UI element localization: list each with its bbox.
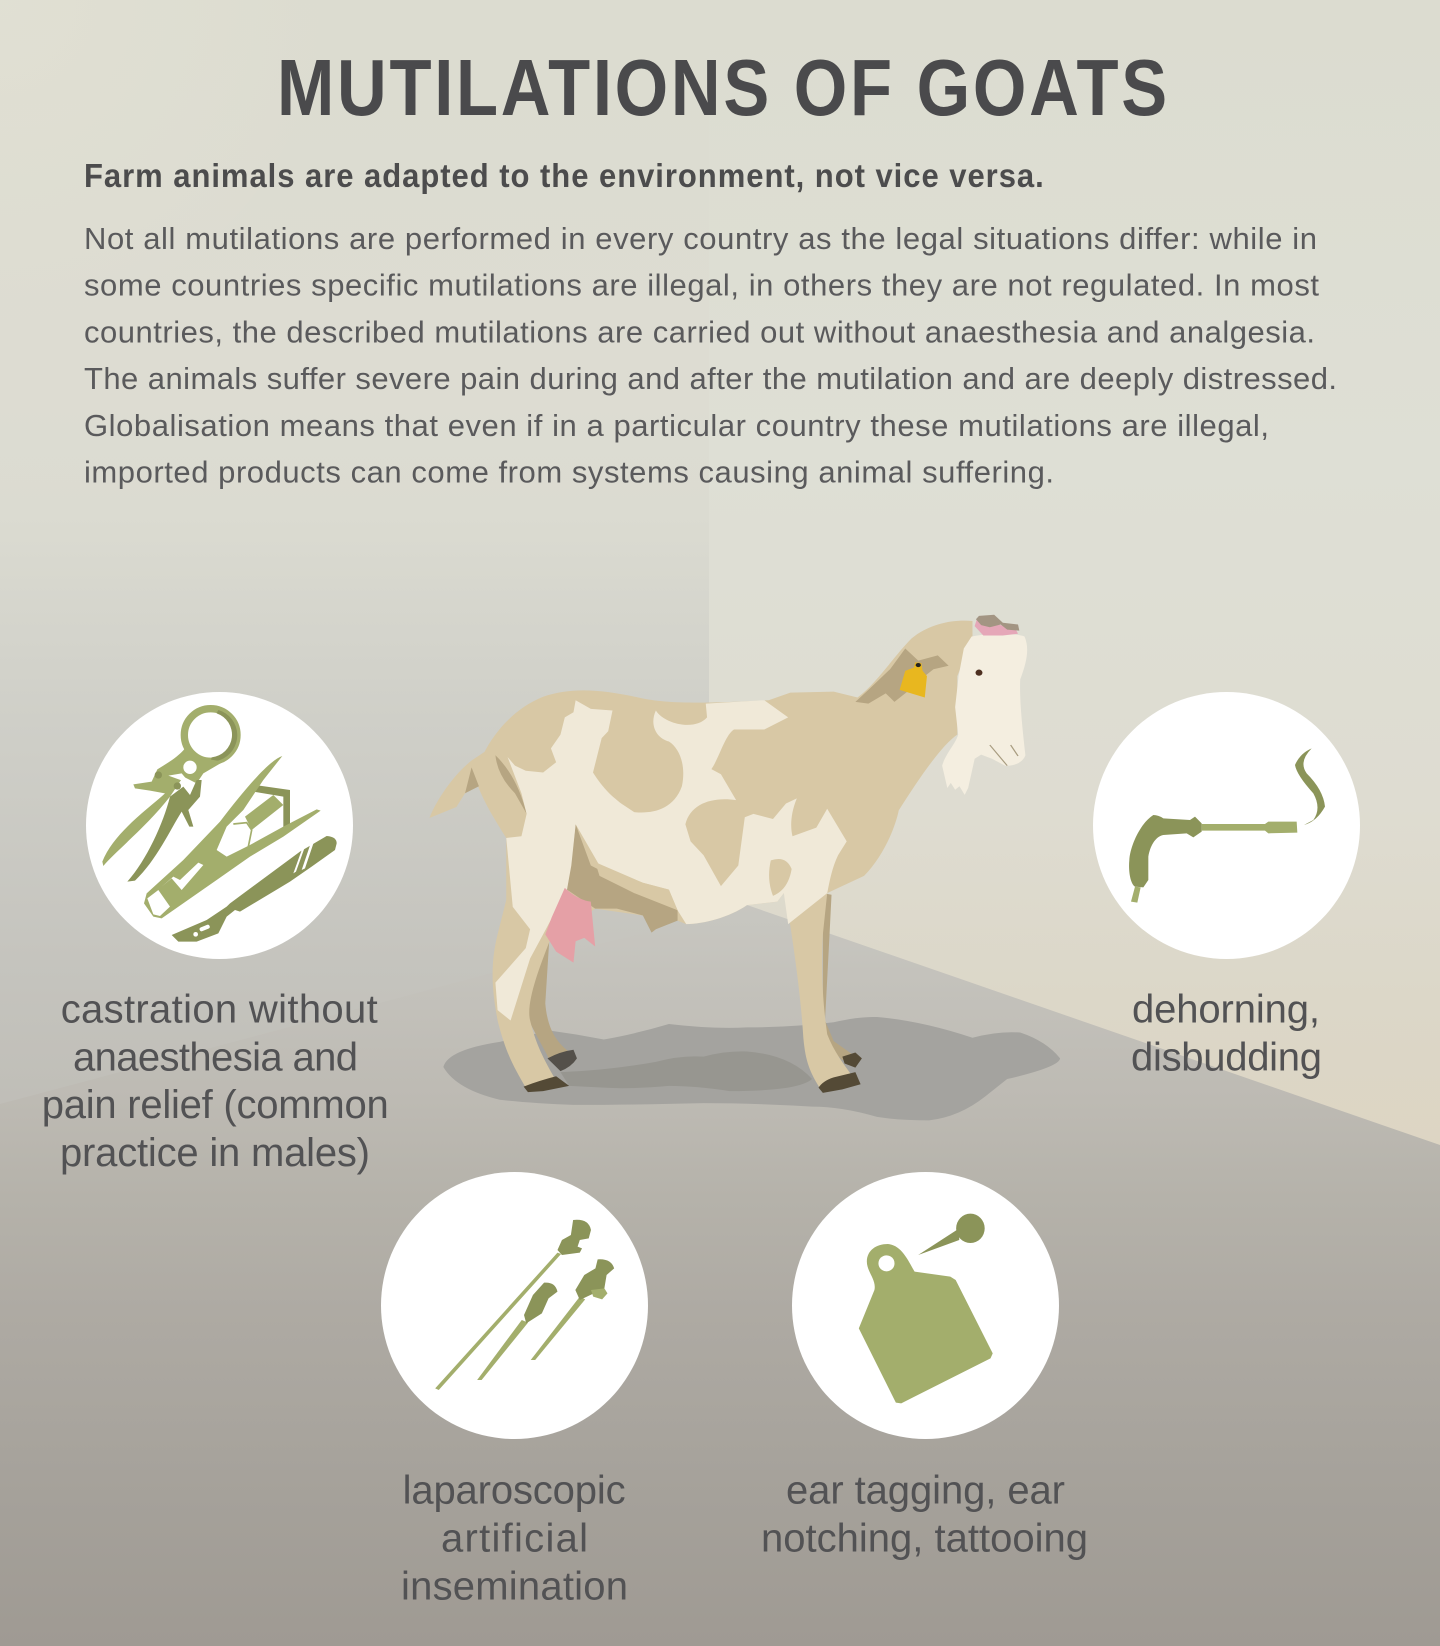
icon: ear tag and pin	[792, 1172, 1059, 1439]
caption: artificial insemination: laparoscopic	[403, 1468, 626, 1512]
ear tag	[900, 662, 927, 697]
udder	[545, 888, 595, 963]
subheading: Farm animals are adapted to the environment, not vice versa.	[84, 157, 1044, 194]
hooves	[524, 1072, 861, 1093]
caption: artificial insemination: artificial	[441, 1517, 588, 1561]
panel: artificial insemination	[381, 1172, 648, 1608]
ear shading	[855, 649, 949, 704]
intro paragraph: imported products can come from systems causing animal suffering.	[84, 454, 1054, 490]
caption: artificial insemination	[401, 1468, 628, 1608]
caption: dehorning: disbudding	[1131, 1036, 1322, 1080]
eye and mouth	[976, 670, 1018, 766]
caption: ear tagging: notching, tattooing	[761, 1517, 1088, 1561]
caption: ear tagging: ear tagging, ear	[786, 1468, 1065, 1512]
far legs	[521, 893, 862, 1071]
white coat patches	[495, 700, 847, 1020]
caption: artificial insemination: insemination	[401, 1564, 628, 1608]
intro paragraph: Not all mutilations are performed in every country as the legal situations differ: while in	[84, 221, 1317, 256]
caption: castration	[42, 988, 389, 1175]
caption: ear tagging	[761, 1468, 1088, 1561]
intro paragraph: Globalisation means that even if in a particular country these mutilations are illegal,	[84, 408, 1269, 443]
belly patch	[595, 862, 678, 910]
belly shadow	[567, 824, 678, 933]
goat shadow	[443, 1017, 1060, 1120]
title: MUTILATIONS OF GOATS	[277, 42, 1167, 132]
panel: castration	[42, 692, 389, 1175]
intro paragraph: countries, the described mutilations are carried out without anaesthesia and analgesia.	[84, 314, 1315, 349]
goat illustration with shadow	[429, 615, 1060, 1120]
icon: laparoscopic instruments	[381, 1172, 648, 1439]
head	[942, 634, 1027, 795]
panel: ear tagging	[761, 1172, 1088, 1561]
tail and flank shading	[465, 755, 527, 814]
caption: castration: practice in males)	[60, 1131, 370, 1175]
panel: dehorning	[1093, 692, 1360, 1080]
caption: castration: castration without	[61, 988, 378, 1032]
horn stubble	[976, 615, 1019, 631]
icon: castration tools	[86, 692, 353, 959]
intro paragraph	[84, 221, 1337, 490]
caption: dehorning: dehorning,	[1132, 988, 1320, 1032]
intro paragraph: some countries specific mutilations are illegal, in others they are not regulated. In most	[84, 268, 1319, 303]
caption: dehorning	[1131, 988, 1322, 1080]
intro paragraph: The animals suffer severe pain during and after the mutilation and are deeply distressed.	[84, 361, 1337, 396]
disbudded horn wound	[975, 619, 1018, 635]
caption: castration: anaesthesia and	[73, 1036, 358, 1080]
goat body base	[429, 621, 972, 1089]
icon: disbudding iron	[1093, 692, 1360, 959]
shoulder spot	[769, 859, 792, 896]
caption: castration: pain relief (common	[42, 1083, 389, 1127]
